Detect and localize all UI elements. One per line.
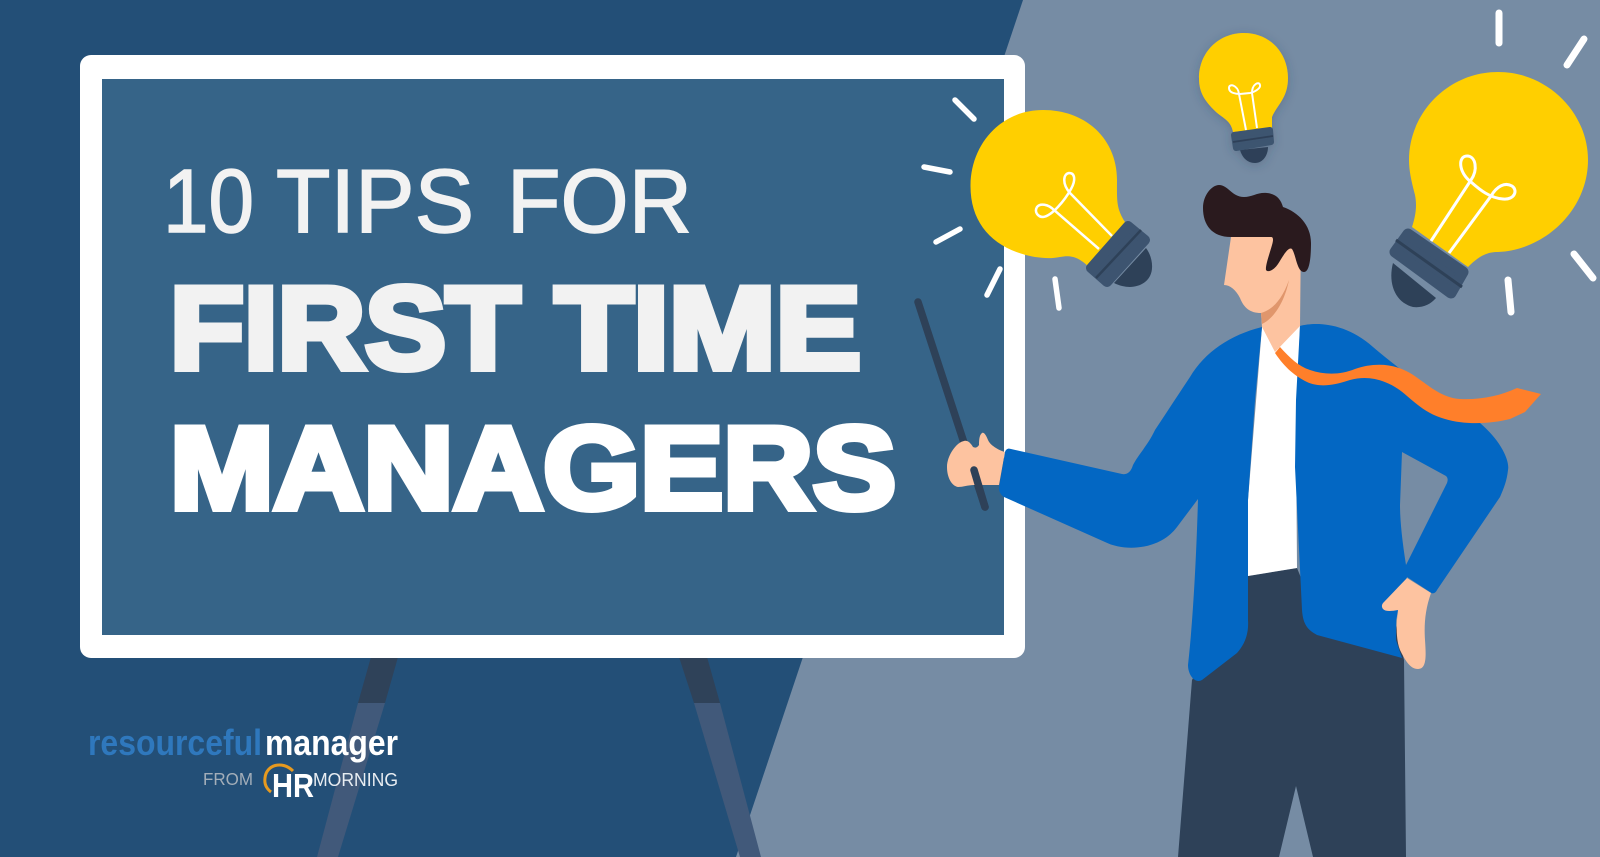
title line: 10 tips for: TIPS [276, 152, 474, 252]
title line: 10 tips for: 10 [163, 152, 254, 252]
presentation board [80, 55, 1025, 658]
title line: first time: TIME [555, 262, 861, 394]
icon: left bulb rays [924, 100, 1059, 308]
right hand [1382, 578, 1431, 669]
stick over hand [974, 470, 985, 507]
logo [88, 722, 398, 804]
chin shadow [1261, 280, 1289, 324]
jacket right side and arm on hip [1295, 324, 1508, 658]
easel legs [317, 657, 761, 857]
left hand [947, 433, 1005, 487]
title line: first time: FIRST [170, 262, 520, 394]
icon: right bulb rays [1499, 13, 1593, 312]
logo text: from: FROM [203, 769, 253, 789]
background: grey diagonal right panel [736, 0, 1600, 857]
face and neck [1224, 230, 1301, 352]
logo wordmark: resourceful manager: manager [265, 722, 398, 763]
icon: top light bulb [1199, 33, 1288, 163]
pointer stick [918, 302, 985, 507]
logo text: morning: MORNING [313, 770, 398, 790]
icon: left light bulb [970, 110, 1152, 287]
logo text: HR: HR [272, 767, 314, 804]
icon: right light bulb [1391, 72, 1588, 307]
logo wordmark: resourceful manager: resourceful [88, 722, 262, 763]
hair [1203, 185, 1311, 272]
man presenter [947, 185, 1541, 857]
necktie [1275, 347, 1541, 423]
trousers [1178, 568, 1406, 857]
title line: 10 tips for: FOR [507, 152, 692, 252]
title line: managers: MANAGERS [170, 402, 896, 534]
logo icon: orange arc [265, 765, 293, 792]
jacket left side and pointing arm [999, 327, 1262, 681]
shirt [1248, 325, 1300, 576]
title [163, 152, 896, 534]
